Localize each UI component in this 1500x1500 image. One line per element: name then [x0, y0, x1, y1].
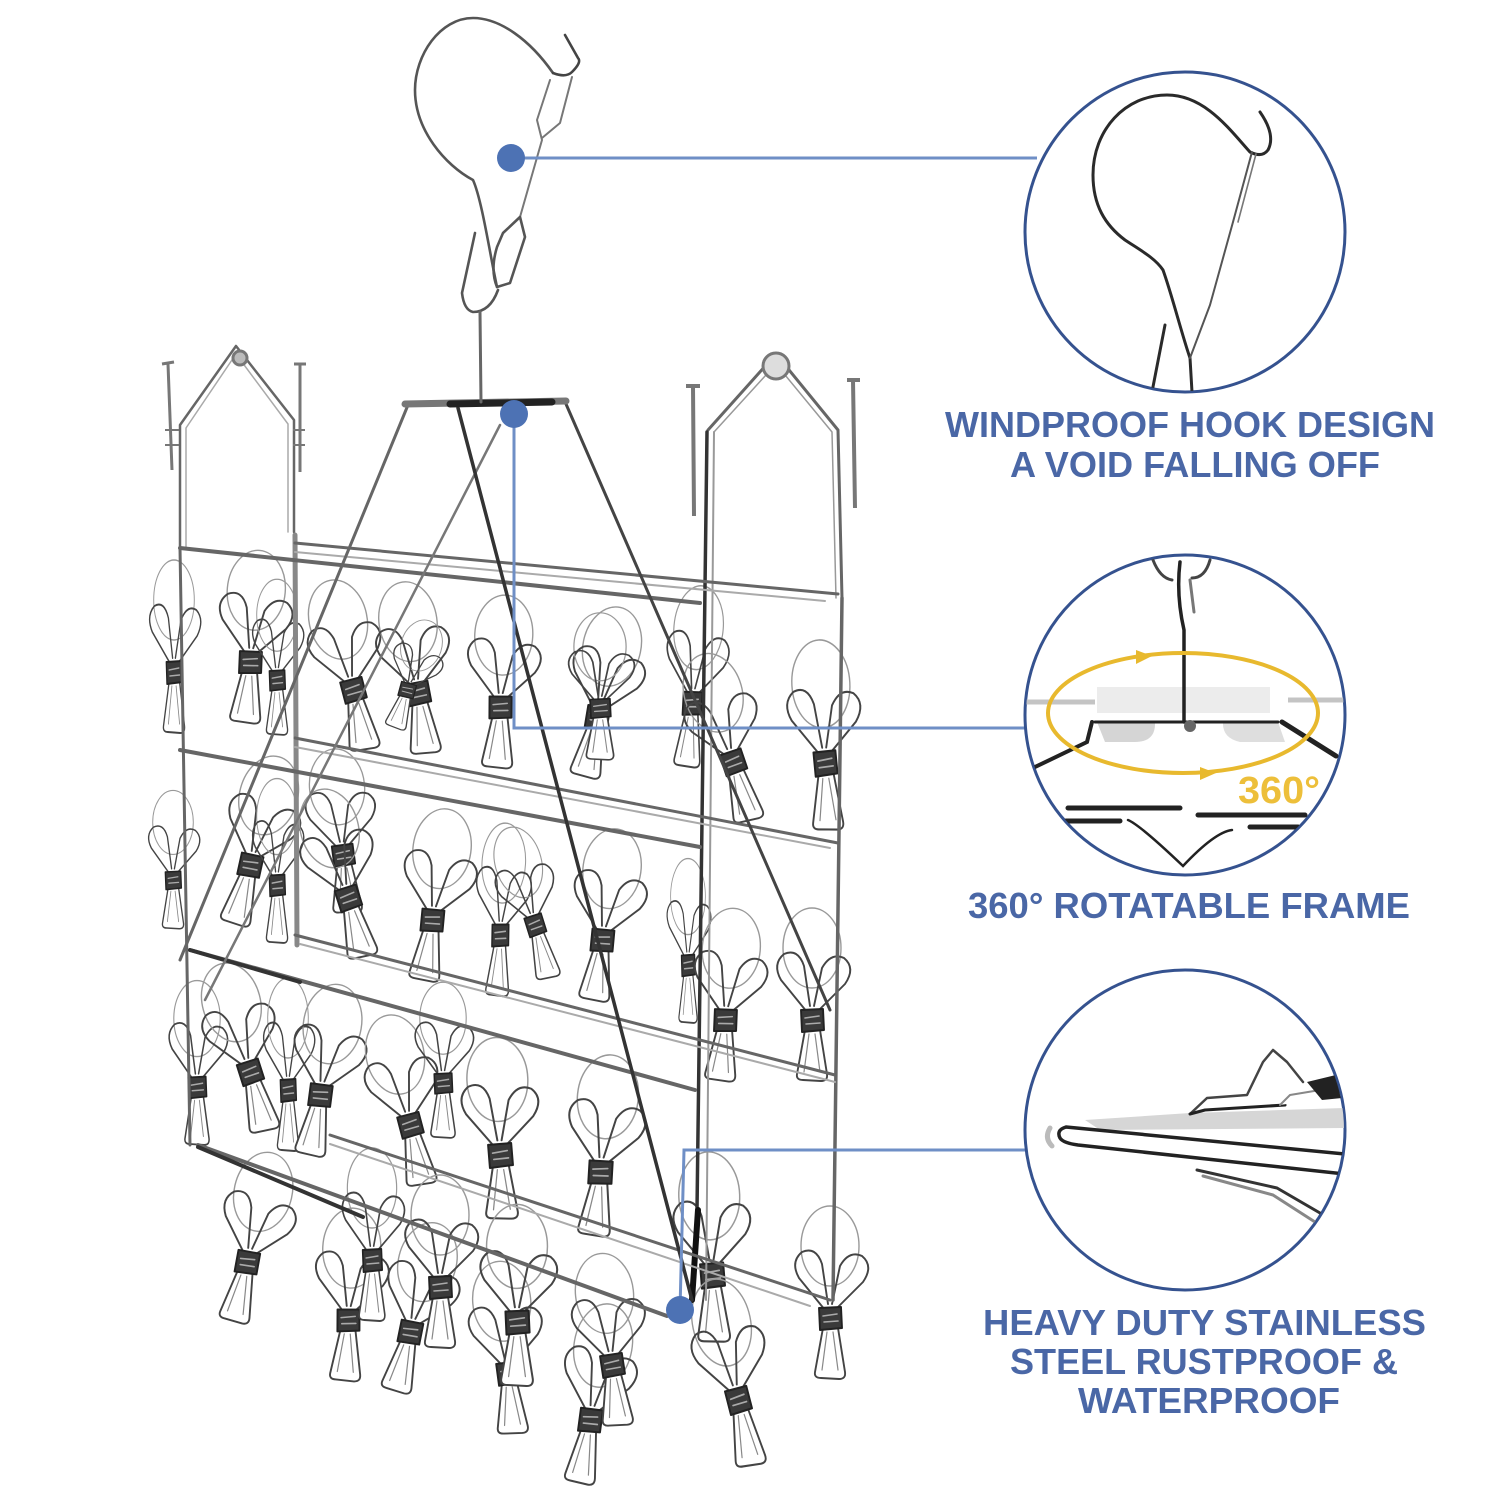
callout line: hook [497, 144, 1037, 172]
caption: steel: STEEL RUSTPROOF & [1010, 1341, 1398, 1382]
frame wires [180, 346, 842, 1316]
caption: hook [945, 404, 1435, 485]
caption: steel: HEAVY DUTY STAINLESS [983, 1302, 1426, 1343]
label: 360 degrees: 360° [1238, 770, 1320, 812]
caption: hook: WINDPROOF HOOK DESIGN [945, 404, 1435, 445]
clothes pegs [149, 547, 868, 1490]
caption: steel: WATERPROOF [1078, 1380, 1340, 1421]
caption: frame: 360° ROTATABLE FRAME [968, 885, 1410, 926]
caption: steel [983, 1302, 1426, 1421]
product illustration: hanging clip rack [149, 18, 868, 1490]
rotation ring [1048, 653, 1318, 773]
top hook [415, 18, 579, 402]
detail circle: steel clip [1025, 970, 1345, 1290]
screws [162, 351, 860, 516]
detail circle: 360 rotation [1025, 555, 1345, 875]
detail circle: hook [1025, 72, 1345, 392]
callout line: steel clip [666, 1150, 1026, 1324]
callout line: rotating frame [500, 400, 1027, 728]
support wires [180, 401, 830, 1300]
caption: hook: A VOID FALLING OFF [1010, 444, 1380, 485]
